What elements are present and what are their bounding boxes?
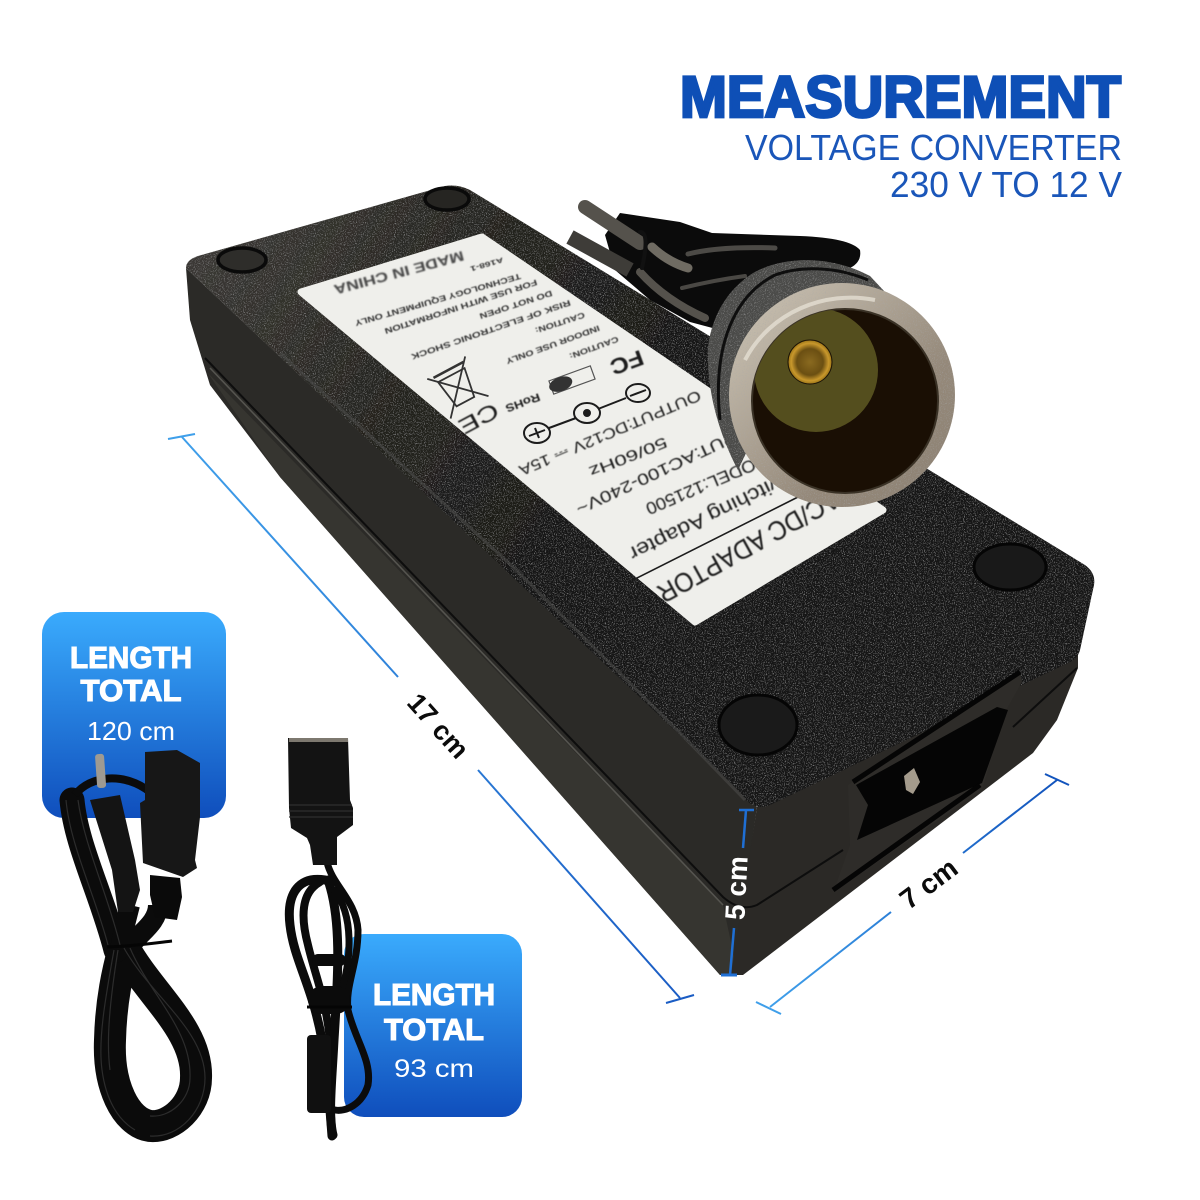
- IEC power inlet: [833, 672, 1022, 893]
- label small caution text: CAUTION:: [534, 310, 586, 335]
- label small caution text: [353, 256, 620, 366]
- highlighted top edge: [280, 353, 745, 800]
- plug pin shaft: [585, 207, 640, 243]
- cigarette socket: [708, 260, 955, 507]
- cord top arc: [75, 778, 150, 795]
- silver rim: [289, 738, 348, 742]
- lower long side band: [207, 372, 738, 975]
- cord highlight lines: [66, 800, 205, 1136]
- label small caution text: RISK OF ELECTRONIC SHOCK: [410, 298, 572, 361]
- cord upper bundle: [72, 800, 116, 950]
- rubber foot: back left: [218, 248, 266, 272]
- label printed text: Switching Adapter: [625, 462, 804, 564]
- long side face: [186, 268, 757, 975]
- socket cord photo: [288, 738, 369, 1136]
- dimension: 17 cm length: [168, 434, 694, 1003]
- callout: power cord length: [42, 612, 226, 818]
- label printed text: INPUT:AC100-240V~: [573, 419, 758, 517]
- end face: [731, 640, 1078, 975]
- title block: [680, 65, 1122, 205]
- socket cavity: [752, 309, 938, 493]
- dimension: 5 cm height: [719, 810, 754, 975]
- cable tie: [307, 1006, 352, 1008]
- cord highlights: [640, 232, 775, 318]
- cable tie: [107, 941, 172, 947]
- subheading: voltage converter: VOLTAGE CONVERTER: [745, 127, 1122, 168]
- cord end: [570, 237, 630, 270]
- label small caution text: INDOOR USE ONLY: [504, 323, 601, 366]
- label small caution text: TECHNOLOGY EQUIPMENT ONLY: [353, 271, 522, 328]
- cord tails to connectors: [120, 905, 158, 950]
- ring highlight: [745, 298, 875, 360]
- barrel dark ridge: [718, 269, 868, 420]
- callout: power cord length: 120 cm: [87, 716, 175, 746]
- label printed text: RoHS: [504, 390, 542, 414]
- callout: power cord length: LENGTH: [70, 640, 192, 675]
- label printed text: FC: [606, 345, 647, 380]
- gold centre pin: [788, 340, 832, 384]
- product label: [301, 237, 883, 622]
- label: 5 cm: 5 cm: [719, 855, 754, 921]
- rubber foot: right: [974, 544, 1046, 590]
- connector strain relief: [150, 875, 182, 920]
- heading: measurement: MEASUREMENT: [680, 65, 1121, 130]
- label printed text: [454, 345, 845, 609]
- top face: [186, 186, 1094, 807]
- label small caution text: A168-1: [469, 256, 504, 272]
- cord loops: [289, 862, 369, 1136]
- C13 connector: [140, 750, 200, 877]
- label header rule: [633, 496, 800, 580]
- olive inner disc: [754, 308, 878, 432]
- subheading: voltage range: 230 V TO 12 V: [890, 164, 1122, 205]
- label printed text: MODEL:121500: [643, 449, 773, 518]
- label printed text: CE: [454, 398, 503, 439]
- socket head: [288, 738, 353, 865]
- label printed text: OUTPUT:DC12V ⎓ 15A: [516, 386, 703, 479]
- callout: power cord length: TOTAL: [80, 673, 182, 708]
- socket grey barrel: [708, 260, 885, 470]
- adapter body: [186, 186, 1094, 975]
- cord lower loop: [110, 948, 196, 1126]
- metal ring: [729, 283, 955, 507]
- power cord photo: [66, 750, 205, 1136]
- ferrite bead: [307, 1035, 331, 1113]
- polarity symbol: [524, 384, 650, 443]
- compliance mark box: [547, 366, 595, 395]
- made in china text: MADE IN CHINA: [332, 248, 466, 298]
- label: 17 cm: 17 cm: [401, 688, 475, 764]
- callout: socket cord length: TOTAL: [384, 1012, 484, 1047]
- black cord mass: [605, 213, 860, 330]
- label small caution text: CAUTION:: [568, 334, 620, 361]
- rubber foot: back right: [425, 188, 469, 210]
- label printed text: 50/60Hz: [586, 433, 669, 480]
- label: 7 cm: 7 cm: [894, 852, 964, 915]
- rubber foot: front: [719, 695, 797, 755]
- label printed text: AC/DC ADAPTOR: [652, 484, 845, 609]
- seam grooves: [205, 358, 1077, 907]
- WEEE bin symbol: [426, 356, 489, 420]
- callout: socket cord length: LENGTH: [373, 977, 495, 1012]
- cords behind socket: [570, 207, 860, 330]
- label small caution text: DO NOT OPEN: [478, 289, 553, 321]
- grip ribs: [289, 805, 353, 817]
- dimension: 7 cm width: [756, 774, 1069, 1014]
- label small caution text: FOR USE WITH INFORMATION: [383, 278, 538, 336]
- callout: socket cord length: 93 cm: [394, 1055, 474, 1083]
- callout: socket cord length: [344, 934, 522, 1117]
- euro plug pin: [95, 754, 106, 788]
- euro plug body: [90, 795, 140, 912]
